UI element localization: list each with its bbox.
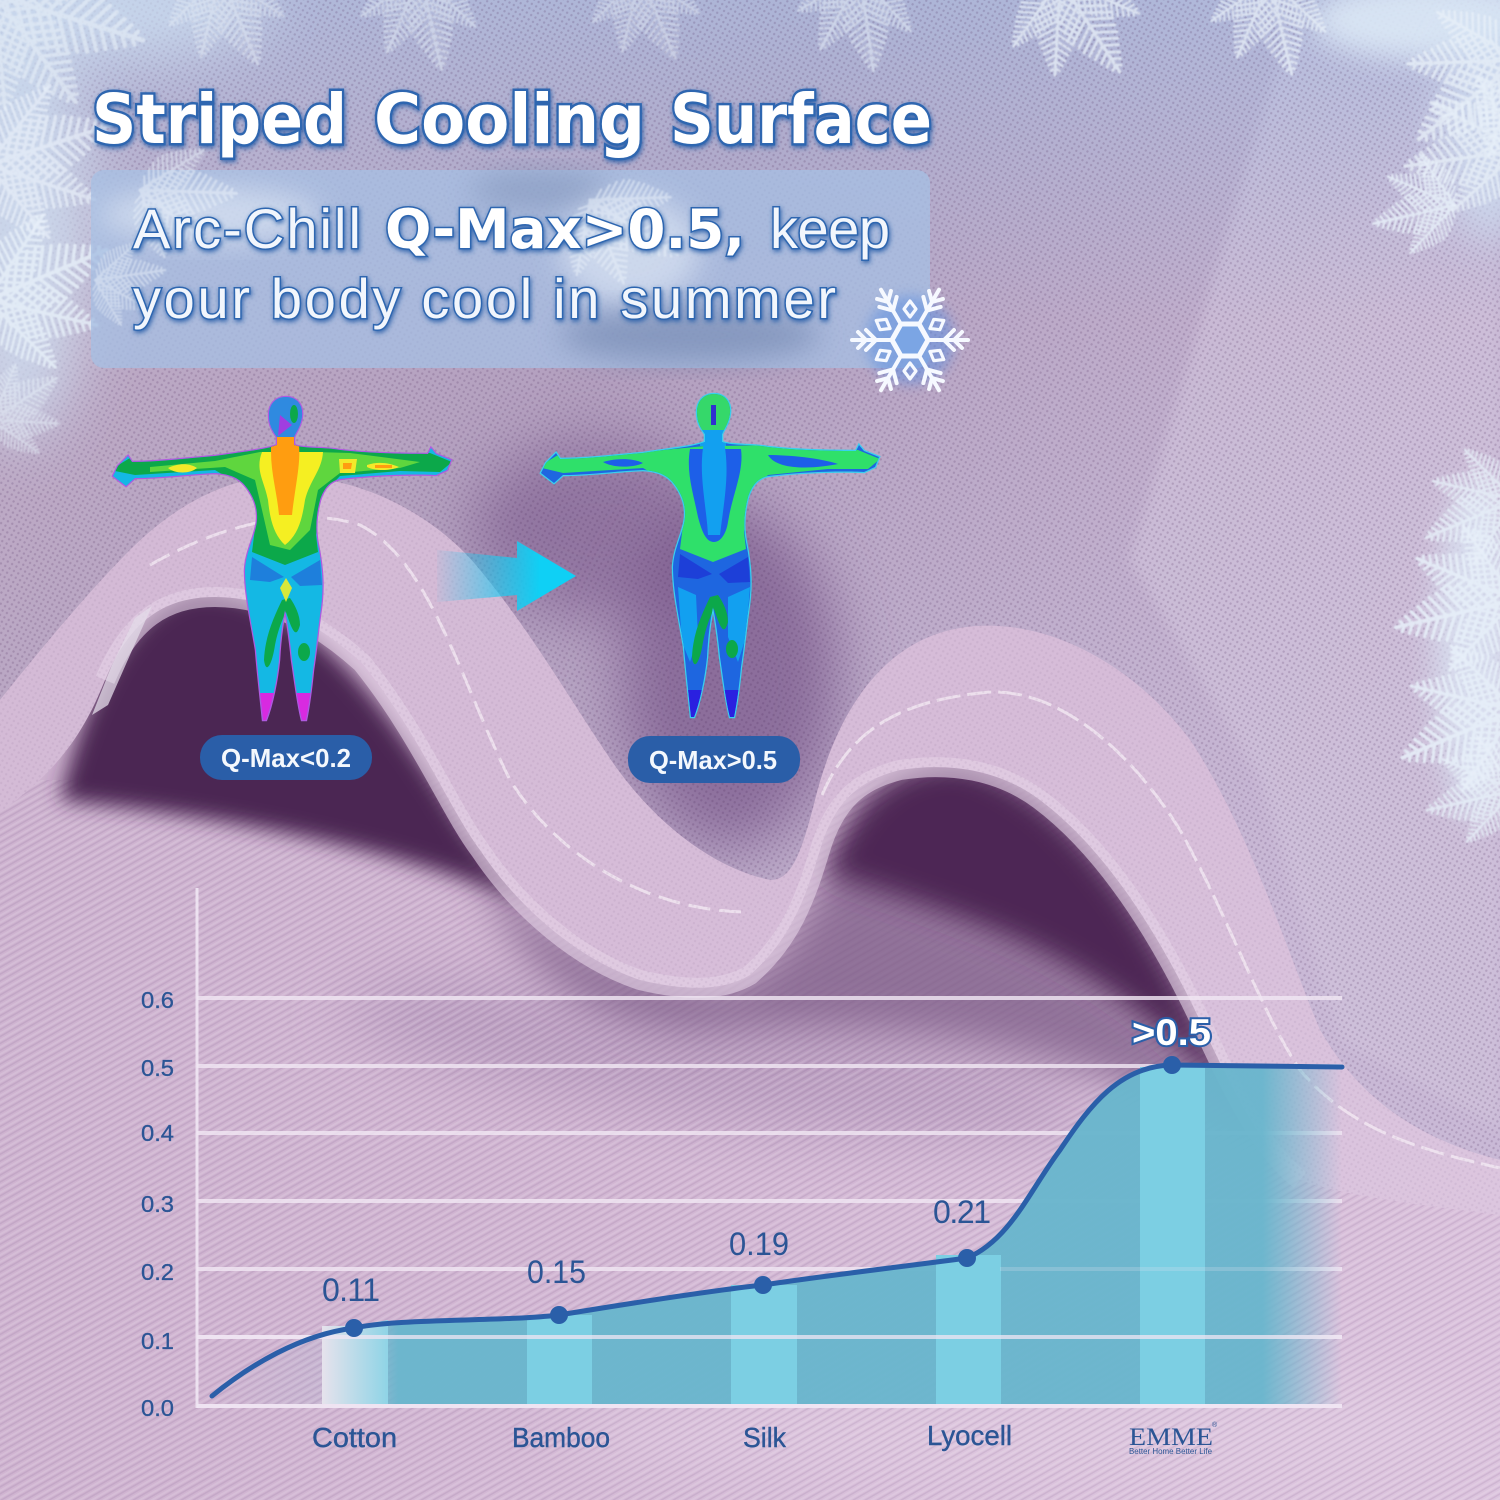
chart bars: [322, 1067, 1205, 1404]
subtitle line one: keep: [770, 197, 890, 260]
data value labels: 0.19: [729, 1226, 789, 1262]
subtitle line one: Arc-Chill: [133, 197, 361, 260]
lower grid lines and baseline over the area: [197, 1269, 1342, 1406]
background: dark hollows under the fold: [60, 590, 1270, 1150]
brand logo: ®: [1212, 1421, 1218, 1429]
arrow: cooling transition: [437, 541, 576, 611]
y-axis labels: 0.1: [141, 1328, 174, 1354]
data value labels: 0.15: [527, 1254, 586, 1290]
y-axis labels: 0.0: [141, 1395, 174, 1421]
label: Q-Max above 0.5: [628, 736, 800, 783]
category labels: Cotton: [312, 1422, 397, 1453]
data value labels: 0.21: [933, 1194, 991, 1230]
frost inside the card: [77, 119, 820, 363]
chart data points: [345, 1056, 1181, 1337]
y-axis labels: 0.4: [141, 1120, 174, 1146]
title: Striped: [92, 80, 347, 160]
figure: cooled thermal body: [540, 392, 881, 718]
category labels: [312, 1420, 1012, 1453]
label: Q-Max above 0.5: Q-Max>0.5: [649, 745, 777, 775]
y-axis labels: 0.5: [141, 1055, 174, 1081]
y-axis labels: 0.6: [141, 987, 174, 1013]
category labels: Silk: [743, 1422, 787, 1453]
chart area fill: [205, 1065, 1342, 1404]
panel: subtitle card: [77, 119, 930, 368]
y-axis labels: 0.2: [141, 1259, 174, 1285]
brand logo: Better Home Better Life: [1129, 1447, 1213, 1456]
label: Q-Max below 0.2: Q-Max<0.2: [221, 743, 351, 773]
icon: snowflake: [852, 277, 968, 403]
category labels: Bamboo: [512, 1422, 610, 1453]
highlighted value label: >0.5: [1132, 1012, 1211, 1053]
brand logo: EMME: [1129, 1424, 1213, 1451]
data value labels: [322, 1194, 991, 1308]
title: Cooling: [374, 80, 645, 160]
subtitle line one: Q-Max>0.5,: [385, 198, 745, 261]
data value labels: 0.11: [322, 1272, 380, 1308]
background: upper knit fabric: [0, 0, 1500, 1160]
figure: warm thermal body: [112, 396, 452, 722]
label: Q-Max below 0.2: [200, 735, 372, 780]
subtitle line two: your body cool in summer: [133, 267, 836, 330]
category labels: Lyocell: [927, 1420, 1012, 1451]
y-axis labels: [141, 987, 174, 1421]
chart line: [212, 1065, 1342, 1396]
chart axes and grid: [197, 888, 1342, 1408]
background: frost border: [0, 0, 1500, 857]
background: hemmed fold band: [0, 476, 1500, 1215]
chart: Q-Max line and area by fabric: [141, 888, 1342, 1456]
y-axis labels: 0.3: [141, 1191, 174, 1217]
brand logo: [1129, 1421, 1218, 1456]
title: Surface: [670, 80, 932, 160]
